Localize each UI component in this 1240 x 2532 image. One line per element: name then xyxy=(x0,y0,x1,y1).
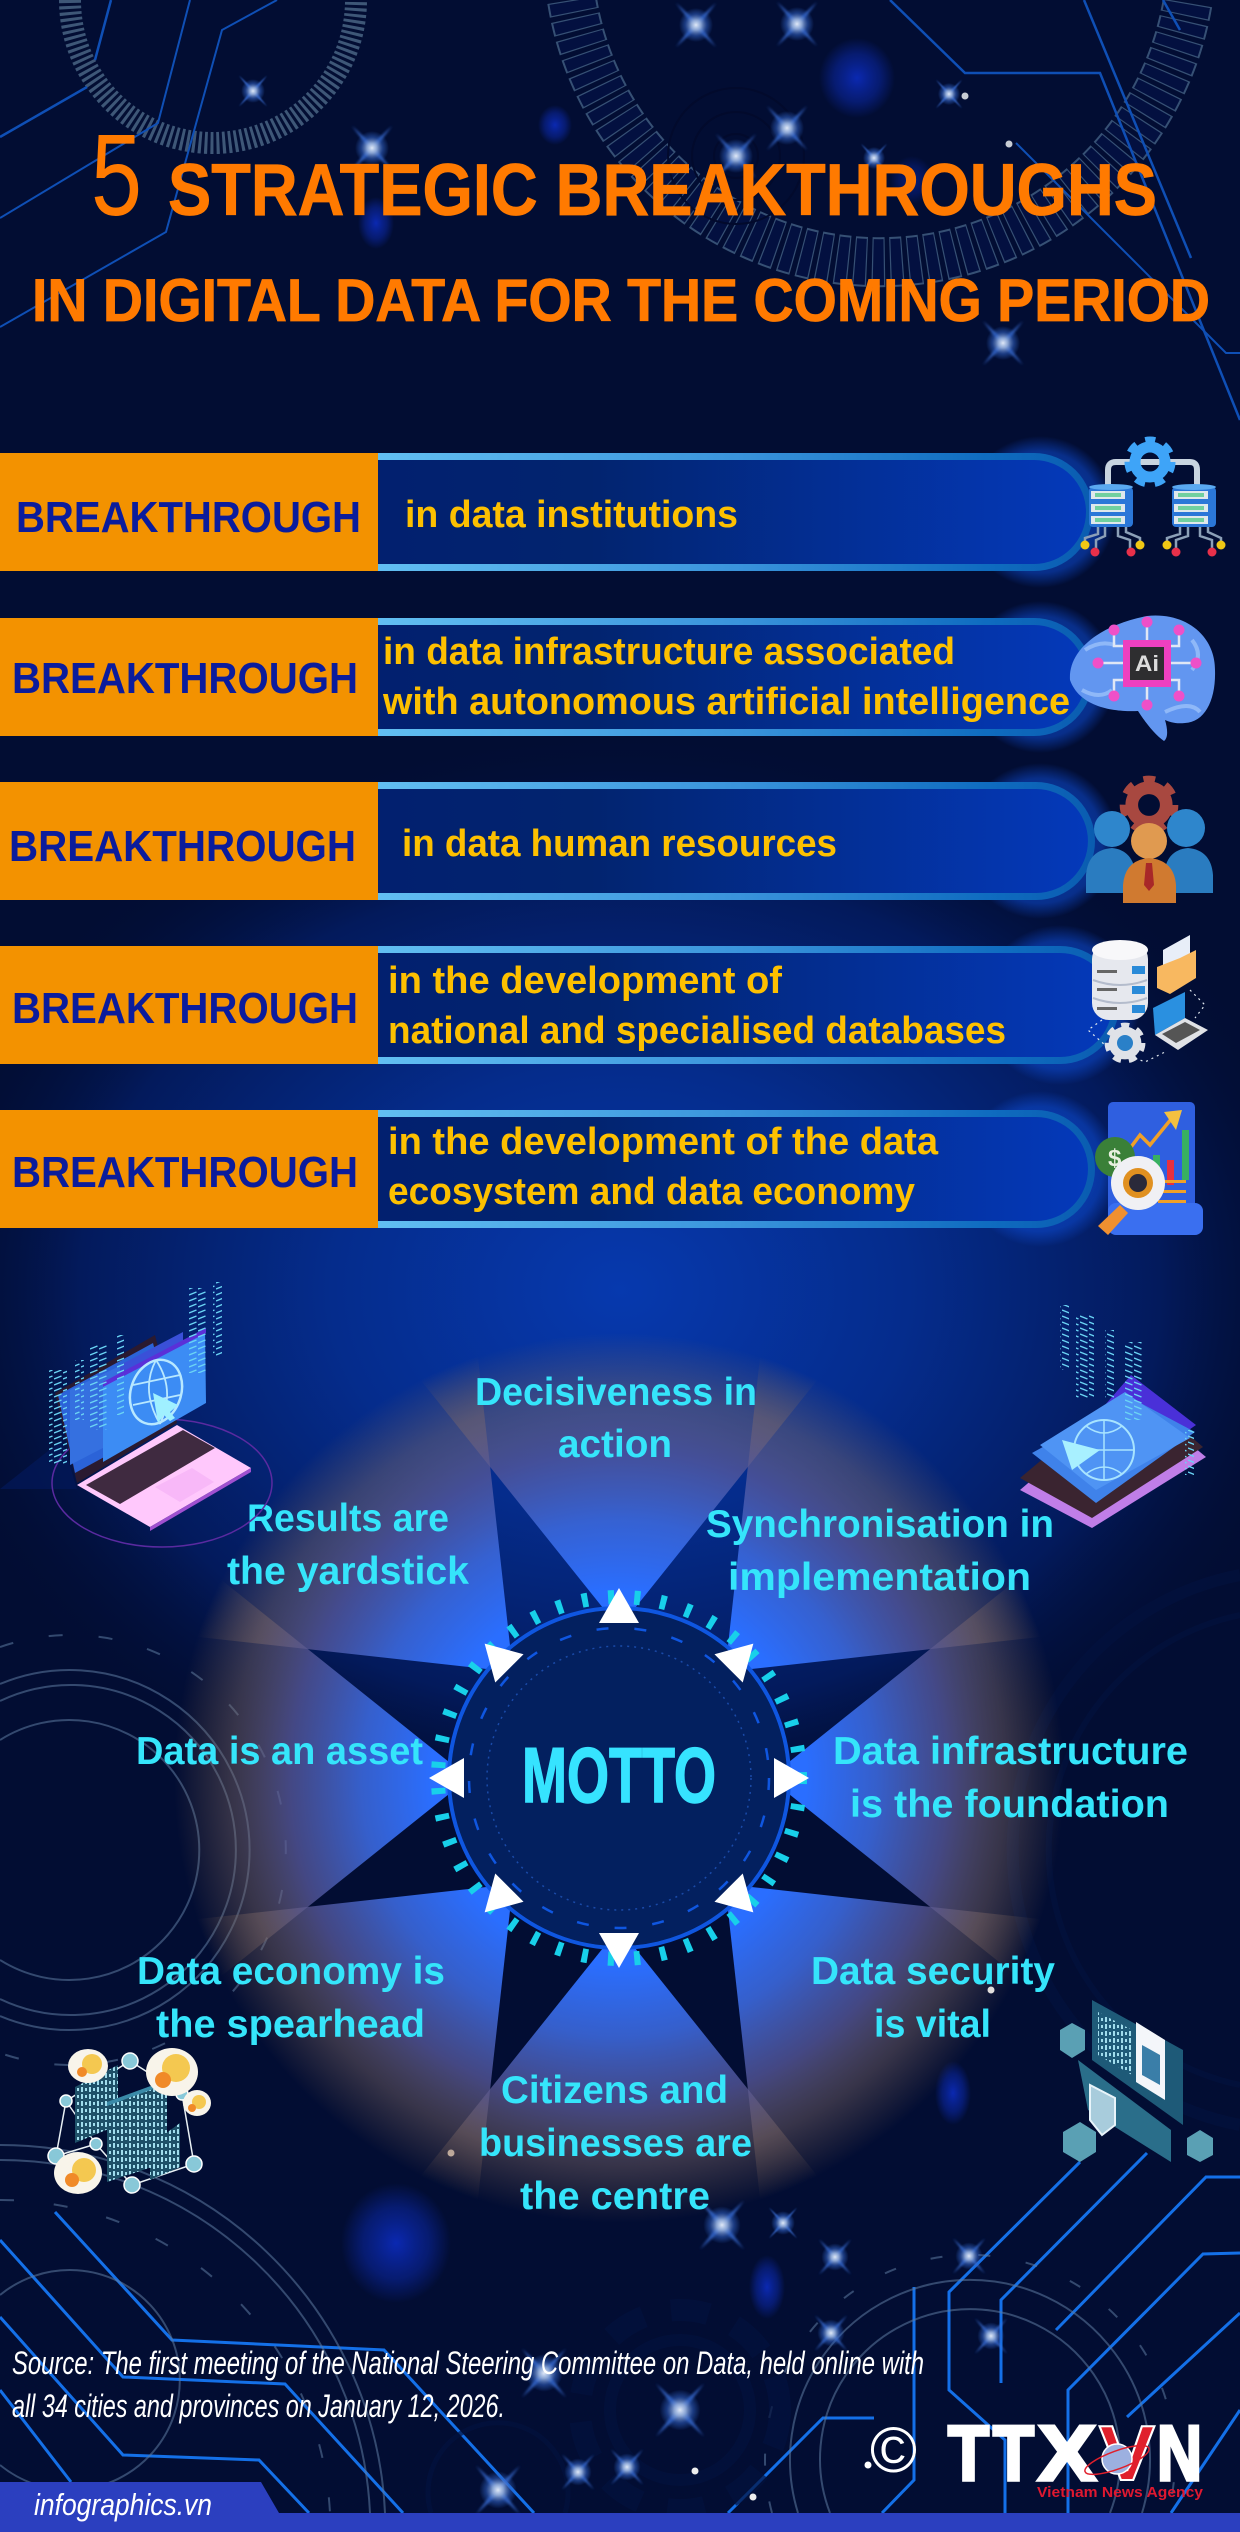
icon: AI brain: Ai xyxy=(1135,651,1159,676)
source note: Source: The first meeting of the National Steering Committee on Data, held online with xyxy=(12,2345,924,2381)
motto: data is an asset: Data is an asset xyxy=(136,1730,423,1773)
footer bar: infographics.vn xyxy=(34,2487,212,2522)
motto circle xyxy=(438,1597,800,1959)
icon: laptop with globe xyxy=(0,1282,272,1547)
motto: results are the yardstick xyxy=(227,1497,469,1593)
breakthrough bar 2: in data infrastructure associated xyxy=(383,631,955,673)
rays: motto starburst xyxy=(131,1290,1107,2266)
motto: results are the yardstick: the yardstick xyxy=(227,1550,469,1593)
logo: TTXVN Vietnam News Agency: T xyxy=(948,2409,989,2497)
icon: people and gear xyxy=(1086,780,1213,903)
motto: data security is vital: is vital xyxy=(874,2003,991,2046)
source note: all 34 cities and provinces on January 12, 2026. xyxy=(12,2388,505,2424)
motto: decisiveness in action xyxy=(475,1371,757,1466)
icon: data economy scroll: $ xyxy=(1108,1145,1122,1172)
motto: data economy is the spearhead xyxy=(137,1950,445,2046)
breakthrough bar 2: with autonomous artificial intelligence xyxy=(382,681,1070,723)
source note xyxy=(12,2345,924,2424)
breakthrough bar 2: BREAKTHROUGH xyxy=(12,654,358,703)
breakthrough bar 4: in the development of xyxy=(388,960,782,1002)
logo: TTXVN Vietnam News Agency: X xyxy=(1038,2409,1096,2497)
motto: data infrastructure is the foundation: Data infrastructure xyxy=(833,1730,1188,1773)
motto circle: MOTTO xyxy=(522,1731,716,1819)
icon: data security folder xyxy=(1060,2000,1213,2162)
breakthrough bar 4: national and specialised databases xyxy=(388,1010,1006,1052)
motto: citizens and businesses are the centre: the centre xyxy=(520,2175,710,2218)
title: 5 xyxy=(91,110,142,240)
motto: citizens and businesses are the centre: businesses are xyxy=(479,2122,752,2165)
breakthrough bar 4: BREAKTHROUGH xyxy=(12,984,358,1033)
motto: results are the yardstick: Results are xyxy=(247,1497,449,1540)
breakthrough bar 2 xyxy=(0,601,1116,753)
arrows around the circle xyxy=(429,1588,809,1968)
motto: decisiveness in action: action xyxy=(558,1423,672,1466)
breakthrough bar 5: in the development of the data xyxy=(388,1121,939,1163)
icon: tablet with globe xyxy=(1020,1305,1206,1528)
motto: citizens and businesses are the centre xyxy=(479,2069,752,2218)
breakthrough bar 1 xyxy=(0,436,1116,588)
motto: synchronisation in implementation: Synchronisation in xyxy=(706,1503,1054,1546)
motto: data infrastructure is the foundation: is the foundation xyxy=(850,1783,1169,1826)
logo: TTXVN Vietnam News Agency: N xyxy=(1157,2409,1202,2497)
footer bar xyxy=(0,2482,1240,2532)
logo: TTXVN Vietnam News Agency: V xyxy=(1099,2409,1155,2497)
breakthrough bar 3 xyxy=(0,763,1118,919)
breakthrough bar 3: in data human resources xyxy=(402,823,837,865)
title xyxy=(32,110,1210,334)
motto: data infrastructure is the foundation xyxy=(833,1730,1188,1826)
breakthrough bar 4 xyxy=(0,925,1140,1085)
motto: data security is vital xyxy=(811,1950,1055,2046)
logo: TTXVN Vietnam News Agency xyxy=(948,2409,1204,2501)
breakthrough bar 1: BREAKTHROUGH xyxy=(16,493,361,542)
motto: synchronisation in implementation: implementation xyxy=(728,1556,1031,1599)
motto: data security is vital: Data security xyxy=(811,1950,1055,1993)
breakthrough bar 5: BREAKTHROUGH xyxy=(12,1148,358,1197)
breakthrough bar 5: ecosystem and data economy xyxy=(388,1171,915,1213)
logo: TTXVN Vietnam News Agency: Vietnam News Agency xyxy=(1037,2484,1204,2501)
motto: synchronisation in implementation xyxy=(706,1503,1054,1599)
copyright symbol: © xyxy=(870,2414,917,2486)
icon: databases and devices xyxy=(1088,935,1208,1062)
icon: coins and data network xyxy=(48,2048,211,2194)
breakthrough bar 5 xyxy=(0,1091,1118,1247)
logo: TTXVN Vietnam News Agency: T xyxy=(993,2409,1034,2497)
breakthrough bar 1: in data institutions xyxy=(405,494,738,536)
motto: citizens and businesses are the centre: Citizens and xyxy=(501,2069,728,2112)
motto: decisiveness in action: Decisiveness in xyxy=(475,1371,757,1414)
icon: data economy scroll xyxy=(1095,1102,1203,1235)
motto: data economy is the spearhead: Data economy is xyxy=(137,1950,445,1993)
icon: gear and servers xyxy=(1080,440,1226,556)
icon: AI brain xyxy=(1070,616,1215,741)
motto: data economy is the spearhead: the spearhead xyxy=(156,2003,425,2046)
breakthrough bar 3: BREAKTHROUGH xyxy=(9,822,356,871)
